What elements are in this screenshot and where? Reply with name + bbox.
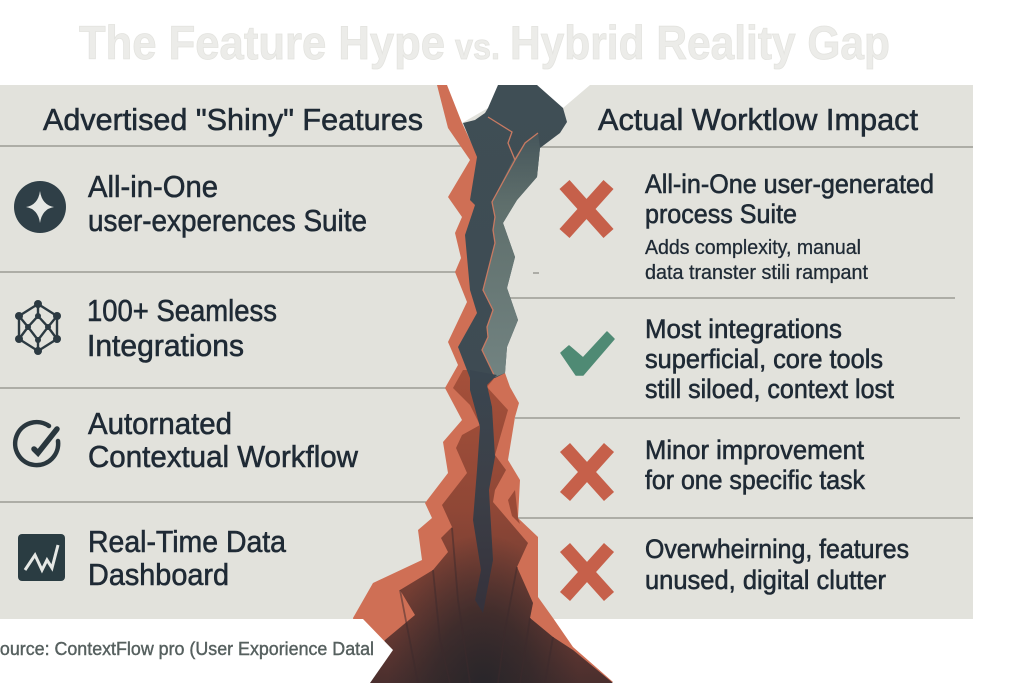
text: integrations [87, 293, 277, 363]
text: row 1: All-in-One user-generated [645, 169, 934, 199]
crack: central darkness [363, 473, 613, 683]
heading: advertised features: Advertised "Shiny" Features [43, 102, 423, 137]
text: row 3 [645, 435, 865, 495]
text: all-in-one suite [88, 169, 367, 238]
crack: brown chasm [363, 370, 613, 683]
title: Hybrid Reality Gap [510, 16, 890, 69]
title: The Feature Hype [79, 16, 445, 69]
text: row 1: data transter stili rampant [645, 261, 868, 284]
text: dashboard: Real-Time Data [88, 524, 287, 559]
text: dashboard: Dashboard [88, 557, 229, 592]
text: row 1: Adds complexity, manual [645, 236, 861, 259]
text: row 2: superficial, core tools [645, 344, 883, 374]
crack: orange edge [353, 85, 613, 683]
title [79, 16, 890, 69]
text: row 2: Most integrations [645, 314, 842, 344]
icon: cross row 1 [564, 184, 608, 234]
icon: dashboard chart [18, 534, 65, 581]
crack illustration [353, 85, 613, 683]
crack: brown sliver [508, 490, 520, 524]
crack: slate upper fissure [458, 85, 567, 378]
icon: workflow gauge check [15, 422, 58, 465]
text: all-in-one suite: user-experences Suite [88, 203, 367, 238]
crack: facet lines [400, 528, 553, 683]
icon: green check [561, 332, 614, 375]
text: workflow [88, 406, 359, 474]
crack: grey-green facet [482, 133, 540, 377]
text: row 4: Overwheirning, features [645, 534, 909, 564]
panel: comparison background [0, 85, 973, 619]
text: row 3: Minor improvement [645, 435, 864, 465]
text: row 1 [645, 169, 934, 284]
text: dashboard [88, 524, 287, 592]
source tag [0, 619, 393, 683]
text: workflow: Contextual Workflow [88, 439, 359, 474]
text: row 3: for one specific task [645, 465, 865, 495]
crack: orange veins [482, 117, 538, 377]
text: integrations: Integrations [87, 328, 244, 363]
icon: cross row 3 [565, 448, 609, 496]
crack: dark central fissure [470, 370, 497, 613]
text: row 4 [645, 534, 909, 595]
icon: cross row 4 [565, 548, 609, 596]
text: integrations: 100+ Seamless [87, 293, 277, 328]
icon: integrations network [15, 300, 61, 355]
text: all-in-one suite: All-in-One [88, 169, 218, 204]
heading: actual impact: Actual Worktlow Impact [598, 102, 918, 137]
text: row 1: process Suite [645, 199, 797, 229]
panel: actual workflow impact [510, 102, 973, 596]
text: row 2 [645, 314, 894, 404]
icon: sparkle circle [14, 181, 66, 233]
text: workflow: Autornated [88, 406, 232, 441]
text: row 2: still siloed, context lost [645, 374, 894, 404]
text: row 4: unused, digital clutter [645, 565, 886, 595]
title: vs. [455, 26, 500, 67]
panel: advertised features [0, 102, 470, 592]
